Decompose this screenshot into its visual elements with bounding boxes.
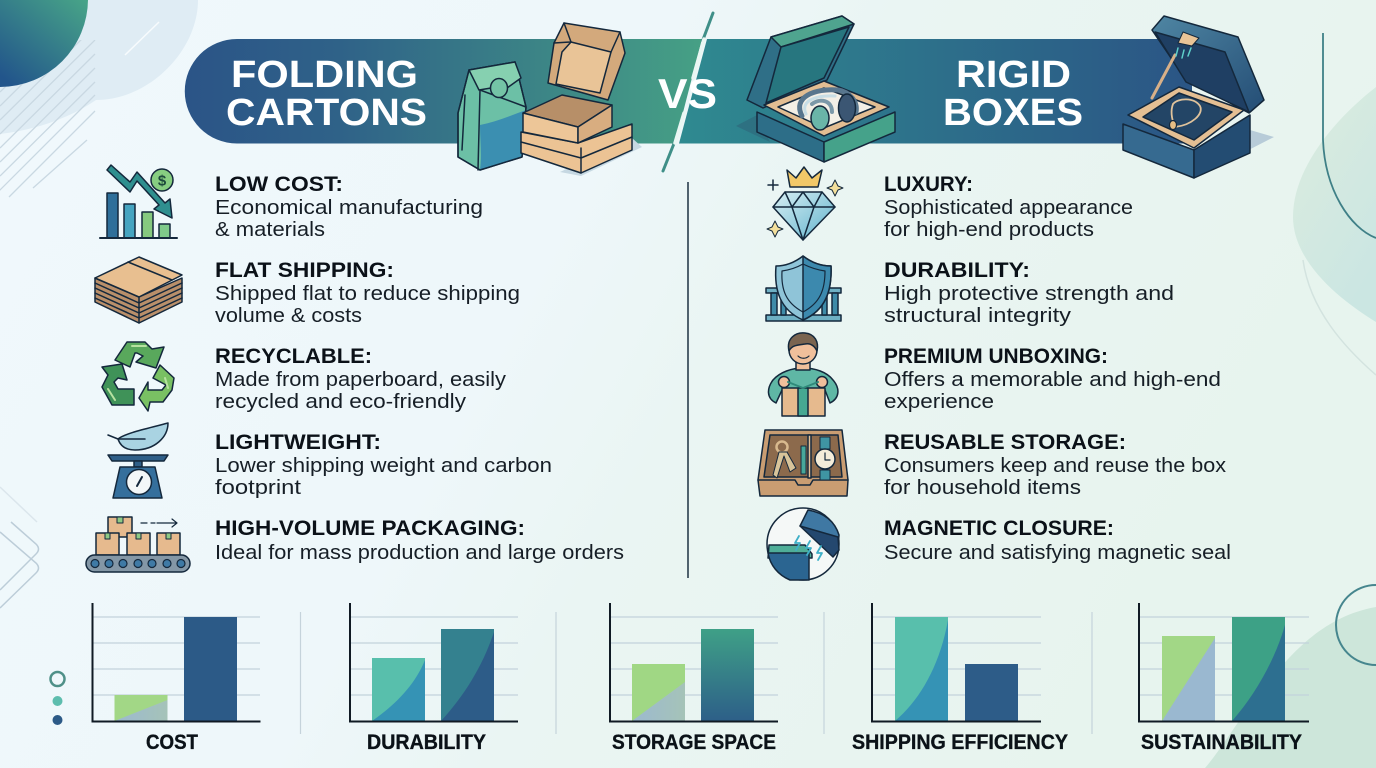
text: flat shipping: FLAT SHIPPING: bbox=[215, 258, 394, 282]
divider bbox=[823, 612, 825, 734]
icon: storage tray bbox=[758, 430, 848, 496]
base bbox=[1123, 87, 1250, 178]
icon: person unboxing bbox=[768, 333, 838, 416]
icon: feather on scale bbox=[108, 423, 168, 498]
text: magnetic closure bbox=[884, 516, 1231, 564]
text: reusable storage bbox=[884, 430, 1227, 499]
icon: magnetic closure bbox=[767, 508, 839, 580]
text: flat shipping: volume & costs bbox=[215, 304, 362, 327]
icon: falling cost chart bbox=[100, 165, 177, 238]
illustration: rigid box with necklace bbox=[1123, 16, 1274, 178]
text: durability: structural integrity bbox=[884, 304, 1072, 327]
panel: folding carton benefits bbox=[86, 165, 624, 572]
text: recyclable: RECYCLABLE: bbox=[215, 344, 372, 368]
illustration: rigid box with headphones bbox=[736, 16, 895, 162]
chart: sustainability: SUSTAINABILITY bbox=[1141, 731, 1302, 754]
text: durability: DURABILITY: bbox=[884, 258, 1030, 282]
text: durability: High protective strength and bbox=[884, 282, 1174, 305]
text: high-volume packaging: HIGH-VOLUME PACKAGING: bbox=[215, 516, 525, 540]
open craft mailer box bbox=[523, 23, 625, 143]
text: low cost bbox=[215, 172, 483, 241]
decoration: right curve bbox=[1323, 33, 1376, 238]
prop ribbon bbox=[1152, 32, 1199, 98]
text: reusable storage: Consumers keep and reuse the box bbox=[884, 454, 1227, 477]
text: magnetic closure: MAGNETIC CLOSURE: bbox=[884, 516, 1114, 540]
decoration: top-left light circle bbox=[0, 0, 198, 134]
icon: conveyor with boxes bbox=[86, 517, 190, 572]
text: luxury: for high-end products bbox=[884, 218, 1094, 241]
chart: shipping efficiency bbox=[852, 603, 1068, 754]
decoration: right blob bbox=[1293, 87, 1376, 322]
text: lightweight: footprint bbox=[215, 476, 301, 499]
lid bbox=[1152, 16, 1264, 113]
illustration: folding carton bag and craft boxes bbox=[458, 23, 642, 176]
text: flat shipping: Shipped flat to reduce shipping bbox=[215, 282, 520, 305]
chart: shipping efficiency: SHIPPING EFFICIENCY bbox=[852, 731, 1068, 754]
decoration: right faint curve bbox=[1303, 260, 1376, 375]
icon: shield and columns bbox=[766, 256, 841, 321]
decoration: bottom-right ring bbox=[1336, 585, 1376, 665]
title: folding cartons bbox=[226, 54, 427, 134]
decoration: white tick bbox=[125, 22, 159, 55]
title: rigid boxes: RIGID bbox=[956, 54, 1071, 96]
text: low cost: & materials bbox=[215, 218, 325, 241]
text: premium unboxing: Offers a memorable and high-end bbox=[884, 368, 1221, 391]
chart: durability: DURABILITY bbox=[367, 731, 486, 754]
text: luxury bbox=[884, 172, 1133, 241]
chart: cost bbox=[92, 603, 260, 754]
chart: sustainability bbox=[1139, 603, 1309, 754]
text: high-volume packaging bbox=[215, 516, 624, 564]
banner left half bbox=[185, 39, 702, 144]
decoration: dots bbox=[50, 672, 64, 725]
divider bbox=[300, 612, 302, 734]
text: high-volume packaging: Ideal for mass production and large orders bbox=[215, 541, 624, 564]
lid bbox=[747, 16, 854, 108]
decoration: bottom-left chevrons bbox=[0, 487, 38, 608]
text: reusable storage: for household items bbox=[884, 476, 1081, 499]
text: recyclable: Made from paperboard, easily bbox=[215, 368, 507, 391]
craft box stack bbox=[521, 124, 632, 173]
title: folding cartons: FOLDING bbox=[231, 54, 418, 96]
text: lightweight bbox=[215, 430, 552, 499]
icon: falling cost chart: $ bbox=[158, 172, 167, 190]
text: premium unboxing bbox=[884, 344, 1221, 413]
vs text: VS bbox=[658, 70, 717, 117]
divider bbox=[555, 612, 557, 734]
icon: recycling arrows bbox=[102, 342, 174, 411]
text: premium unboxing: PREMIUM UNBOXING: bbox=[884, 344, 1108, 368]
decoration: bottom-right blob bbox=[1205, 607, 1376, 768]
chart: storage space bbox=[610, 603, 778, 754]
text: lightweight: Lower shipping weight and carbon bbox=[215, 454, 552, 477]
necklace bbox=[1170, 99, 1201, 130]
panel: comparison charts bbox=[92, 603, 1309, 754]
vs divider slash bbox=[663, 13, 713, 171]
divider bbox=[1091, 612, 1093, 734]
text: recyclable bbox=[215, 344, 507, 413]
base bbox=[757, 81, 895, 162]
text: low cost: LOW COST: bbox=[215, 172, 343, 196]
title: rigid boxes: BOXES bbox=[943, 92, 1083, 134]
chart: cost: COST bbox=[146, 731, 198, 754]
shadow bbox=[736, 115, 770, 142]
headphones bbox=[800, 90, 856, 130]
banner right half bbox=[679, 39, 1192, 144]
shadow bbox=[1194, 130, 1274, 178]
text: recyclable: recycled and eco-friendly bbox=[215, 390, 467, 413]
decoration: top-left gradient circle bbox=[0, 0, 88, 87]
icon: flat stack bbox=[95, 257, 182, 323]
bag bbox=[458, 62, 526, 170]
shadow bbox=[560, 138, 642, 176]
decoration: diagonal stripes bbox=[0, 40, 96, 198]
text: premium unboxing: experience bbox=[884, 390, 994, 413]
text: low cost: Economical manufacturing bbox=[215, 196, 483, 219]
title: rigid boxes bbox=[943, 54, 1083, 134]
title: folding cartons: CARTONS bbox=[226, 92, 427, 134]
icon: crowned diamond bbox=[767, 167, 843, 240]
text: flat shipping bbox=[215, 258, 520, 327]
center divider bbox=[687, 182, 689, 578]
text: lightweight: LIGHTWEIGHT: bbox=[215, 430, 381, 454]
text: durability bbox=[884, 258, 1174, 327]
chart: storage space: STORAGE SPACE bbox=[612, 731, 776, 754]
text: luxury: LUXURY: bbox=[884, 172, 973, 196]
header banner bbox=[185, 13, 1192, 171]
chart: durability bbox=[350, 603, 518, 754]
text: reusable storage: REUSABLE STORAGE: bbox=[884, 430, 1126, 454]
text: magnetic closure: Secure and satisfying magnetic seal bbox=[884, 541, 1231, 564]
panel: rigid box benefits bbox=[758, 167, 1231, 580]
text: luxury: Sophisticated appearance bbox=[884, 196, 1133, 219]
